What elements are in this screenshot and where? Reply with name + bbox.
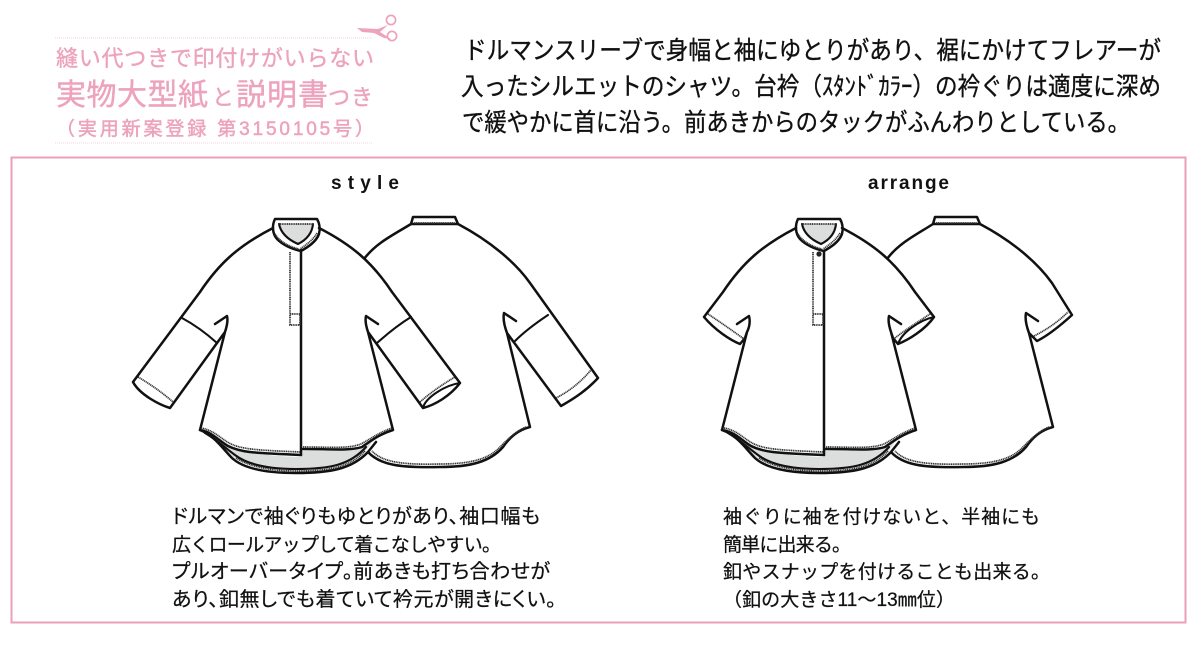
arrange caption: 袖ぐりに袖を付けないと、半袖にも [723, 506, 1040, 528]
description text [461, 37, 1161, 137]
left sleeve and side [133, 228, 301, 455]
placket [823, 252, 825, 455]
title line 2: つき [328, 85, 373, 110]
arrange caption: 釦やスナップを付けることも出来る。 [723, 561, 1050, 583]
arrange caption: 簡単に出来る。 [723, 534, 851, 556]
hem under layers [722, 430, 899, 473]
style caption [172, 505, 556, 611]
illustration: arrange front view [704, 219, 934, 473]
illustration: style back view [364, 217, 598, 467]
illustration: arrange back view [887, 217, 1072, 467]
style caption: あり、釦無しでも着ていて衿元が開きにくい。 [172, 588, 556, 611]
title line 2 [56, 79, 373, 112]
placket [300, 250, 302, 455]
title line 3: （実用新案登録 第3150105号） [56, 118, 374, 140]
description text: で緩やかに首に沿う。前あきからのタックがふんわりとしている。 [462, 109, 1130, 137]
title line 2: 説明書 [236, 79, 328, 112]
style caption: ドルマンで袖ぐりもゆとりがあり、袖口幅も [172, 505, 540, 528]
arrange caption: （釦の大きさ11～13㎜位） [723, 589, 955, 611]
pink title block [55, 38, 374, 143]
right sleeve and side [302, 228, 460, 450]
title line 2: と [212, 85, 234, 110]
panel: style and arrange frame [12, 158, 1186, 622]
hem under layers [200, 430, 376, 473]
title line 2: 実物大型紙 [56, 79, 208, 112]
icon: scissors [357, 15, 397, 41]
heading: arrange: arrange [868, 173, 949, 194]
title line 1: 縫い代つきで印付けがいらない [56, 46, 374, 71]
style caption: プルオーバータイプ。前あきも打ち合わせが [172, 560, 550, 583]
arrange caption [723, 506, 1050, 611]
collar [802, 224, 836, 244]
left short sleeve and side [704, 228, 824, 455]
style caption: 広くロールアップして着こなしやすい。 [172, 534, 501, 556]
illustration: style front view [133, 219, 460, 473]
right short sleeve and side [825, 228, 934, 450]
heading: style: style [331, 173, 399, 194]
collar [279, 224, 313, 244]
icon: button [816, 251, 822, 257]
